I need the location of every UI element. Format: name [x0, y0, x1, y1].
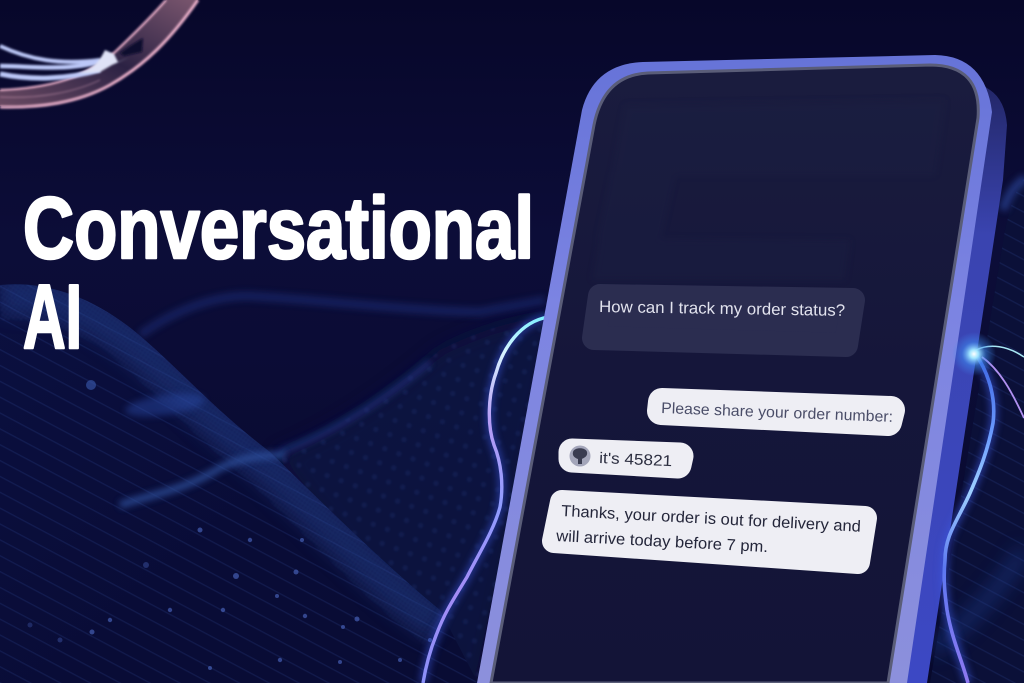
bright crest band [0, 295, 440, 625]
front glowing ridge [120, 455, 285, 505]
pink cable edges [0, 0, 198, 107]
bubble: user question: How can I track my order status? [599, 298, 845, 320]
upper blurred ridge [140, 296, 545, 335]
phone front frame [477, 55, 992, 683]
particle wave: right side [930, 178, 1024, 683]
bubble: delivery confirmation [554, 502, 865, 562]
pink and blue cables top left [0, 0, 198, 107]
phone side face [900, 86, 1007, 683]
title: Conversational [23, 180, 534, 277]
phone [477, 55, 1007, 683]
bubble: order number reply [570, 446, 680, 470]
soft blue patch on hill [124, 390, 206, 420]
particle wave: left hill and ridges [0, 270, 560, 683]
cable junction [78, 50, 130, 74]
faint ghost bubbles [592, 100, 945, 280]
title [23, 180, 534, 368]
front dotted hill [0, 270, 490, 683]
glowing cables right of phone [944, 346, 1024, 683]
scattered particles [28, 380, 432, 670]
light flare on phone edge [952, 332, 996, 376]
rear dotted hill [275, 315, 560, 683]
bubble: user question [594, 296, 853, 345]
glowing cable left of phone [423, 317, 548, 683]
blue strands [0, 46, 106, 78]
bubble: delivery confirmation: Thanks, your order is out for delivery and [561, 503, 861, 536]
phone screen [491, 65, 978, 683]
title: AI [23, 267, 82, 368]
bubble: order number reply: it's 45821 [599, 450, 672, 470]
bubble: order number request: Please share your order number: [661, 400, 893, 426]
icon: avatar [570, 446, 590, 466]
bubble: delivery confirmation: will arrive today before 7 pm. [555, 528, 768, 556]
